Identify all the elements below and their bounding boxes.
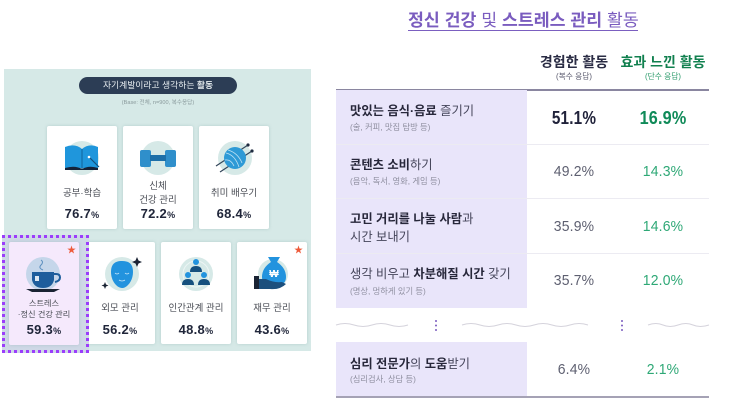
row 1 effect value: 16.9% (640, 108, 686, 128)
label: 인간관계 관리 (168, 303, 224, 314)
card: finance (237, 242, 307, 344)
label (18, 299, 70, 319)
header note: (단수 응답) (645, 72, 681, 81)
value: 76.7% (65, 206, 99, 221)
table top rule (336, 89, 709, 90)
table bottom rule (336, 396, 709, 398)
icon: teacup (26, 257, 61, 292)
row label: 시간 보내기 (350, 230, 410, 244)
header note: (복수 응답) (556, 72, 592, 81)
base note: (Base: 전체, n=900, 복수응답) (122, 100, 194, 106)
row label (350, 212, 474, 244)
row label: 콘텐츠 소비하기 (350, 158, 433, 172)
panel: self-development activities (4, 69, 311, 351)
row 3 experienced value: 35.9% (554, 218, 594, 235)
row 1 (336, 90, 527, 144)
row 4 experienced value: 35.7% (554, 272, 594, 289)
header text: 경험한 활동 (540, 54, 608, 70)
row 3 effect value: 14.6% (643, 218, 683, 235)
card: study (47, 126, 117, 229)
label: 재무 관리 (253, 303, 291, 314)
value: 68.4% (217, 206, 251, 221)
value: 72.2% (141, 206, 175, 221)
icon: open book (65, 141, 100, 175)
card: stress management (9, 242, 79, 345)
row 2 (336, 145, 527, 199)
column header: experienced (540, 54, 608, 81)
value: 48.8% (179, 322, 213, 337)
row 5 experienced value: 6.4% (558, 361, 590, 378)
label: 건강 관리 (139, 195, 177, 206)
column header: effective (620, 54, 706, 81)
label (139, 180, 177, 206)
label: 외모 관리 (101, 303, 139, 314)
card: appearance (85, 242, 155, 344)
title: 정신 건강 및 스트레스 관리 활동 (408, 10, 639, 30)
row label: 고민 거리를 나눌 사람과 (350, 212, 473, 226)
icon: people (179, 257, 213, 291)
row label: 생각 비우고 차분해질 시간 갖기 (350, 267, 511, 281)
label: 스트레스 (29, 299, 59, 308)
row 5 effect value: 2.1% (647, 361, 679, 378)
label: 신체 (149, 181, 167, 192)
row note: (술, 커피, 맛집 탐방 등) (350, 122, 430, 132)
label: ·정신 건강 관리 (18, 310, 70, 319)
row label: 심리 전문가의 도움받기 (350, 357, 470, 371)
row 3 (336, 199, 527, 253)
row note: (음악, 독서, 영화, 게임 등) (350, 176, 440, 186)
icon: star: ★ (294, 245, 303, 255)
card: relationships (161, 242, 231, 344)
row note: (심리검사, 상담 등) (350, 374, 416, 384)
row note: (명상, 멍하게 있기 등) (350, 286, 426, 296)
icon: dumbbell (140, 141, 176, 175)
row 4 (336, 254, 527, 308)
highlighted card: stress and mental health (2, 235, 89, 353)
value: 43.6% (255, 322, 289, 337)
label: 취미 배우기 (211, 188, 257, 199)
icon: face (102, 257, 142, 291)
card: hobby (199, 126, 269, 229)
icon: money bag on hand (254, 257, 288, 290)
icon: yarn ball (216, 141, 254, 175)
pill heading (79, 77, 237, 94)
row 5 (336, 342, 527, 396)
row 2 effect value: 14.3% (643, 163, 683, 180)
value: 56.2% (103, 322, 137, 337)
row 4 effect value: 12.0% (643, 272, 683, 289)
icon: money bag on hand: ₩ (269, 269, 279, 280)
value: 59.3% (27, 322, 61, 337)
omitted rows marker (336, 320, 709, 331)
row label: 맛있는 음식·음료 즐기기 (350, 104, 474, 118)
label: 공부·학습 (63, 188, 101, 199)
row 1 experienced value: 51.1% (552, 108, 596, 128)
card: physical health (123, 126, 193, 229)
row 2 experienced value: 49.2% (554, 163, 594, 180)
icon: star: ★ (67, 245, 76, 255)
pill heading: 자기계발이라고 생각하는 활동 (103, 80, 213, 90)
header text: 효과 느낀 활동 (620, 54, 706, 70)
